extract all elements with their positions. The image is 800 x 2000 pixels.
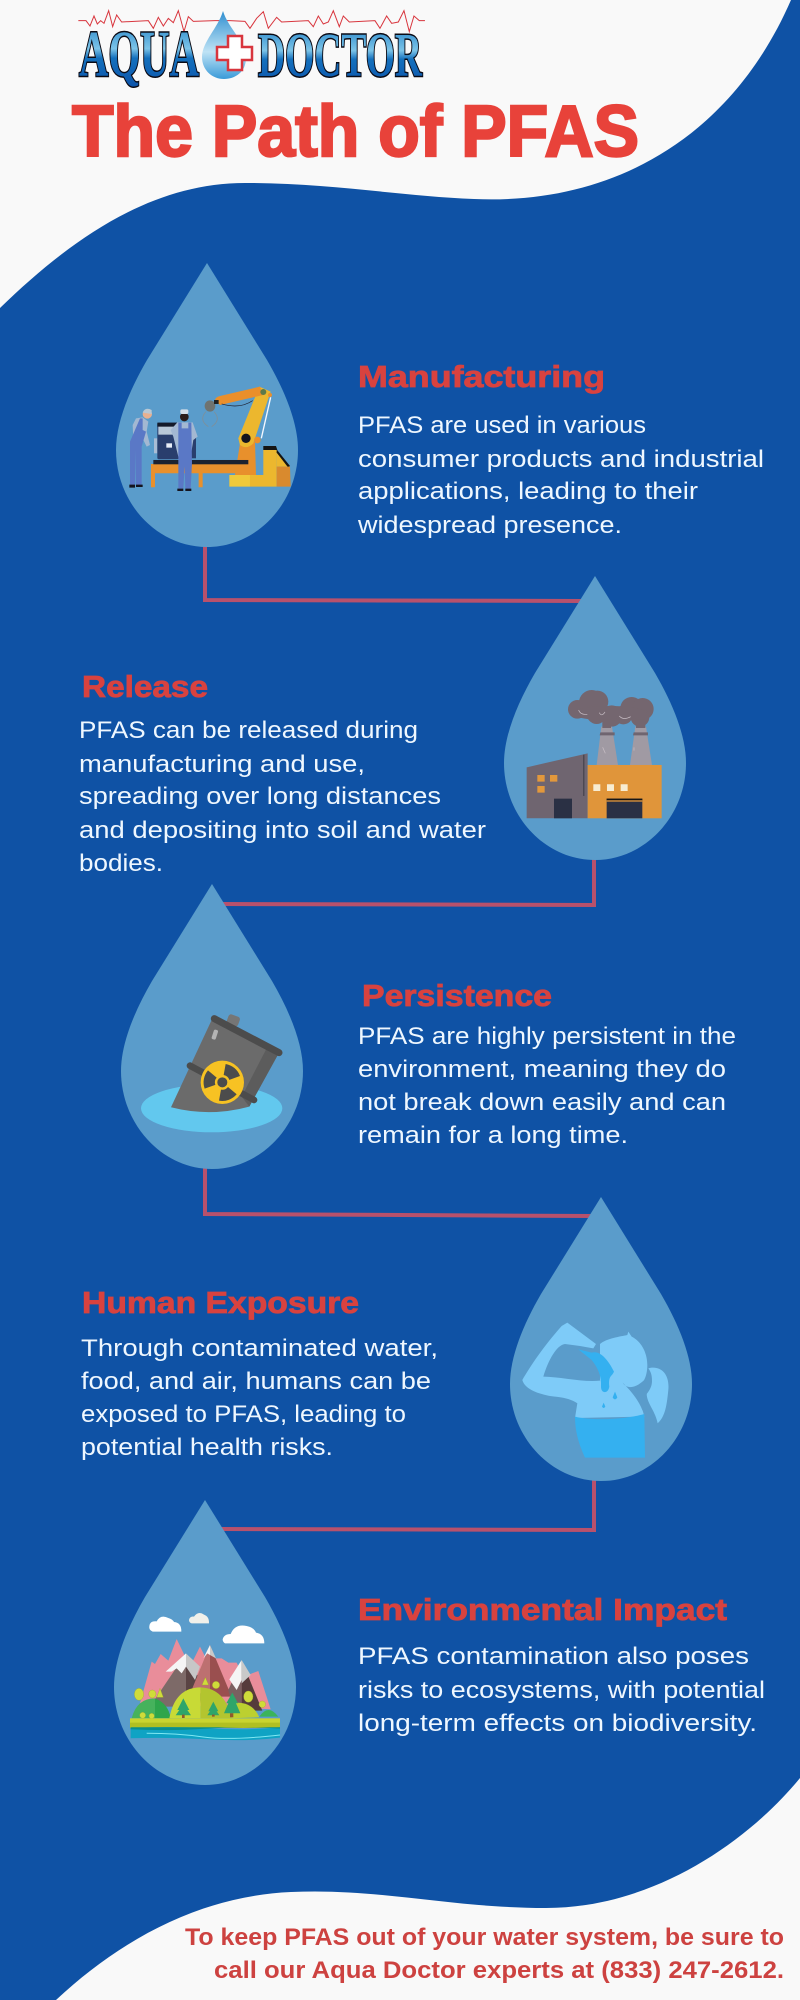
icon: smoking factory	[527, 690, 662, 818]
body text: manufacturing: applications, leading to their	[358, 478, 698, 505]
connector lines	[205, 545, 594, 1530]
body text: persistence: environment, meaning they do	[358, 1056, 726, 1083]
water drop 2	[504, 576, 686, 860]
heading: Release: Release	[82, 669, 208, 704]
icon: radioactive barrel in puddle	[141, 1014, 282, 1132]
body text: human exposure: Through contaminated water,	[81, 1335, 438, 1362]
panel: persistence step	[121, 884, 736, 1169]
body text: human exposure	[81, 1335, 438, 1461]
body text: release: manufacturing and use,	[79, 751, 365, 778]
title: The Path of PFAS	[72, 92, 639, 172]
body text: manufacturing: consumer products and industrial	[358, 446, 764, 473]
body text: manufacturing	[357, 412, 764, 539]
body text: environmental impact	[358, 1643, 765, 1737]
logo word DOCTOR: DOCTOR	[258, 22, 423, 90]
panel: manufacturing step	[116, 263, 764, 547]
body text: persistence	[358, 1023, 736, 1149]
body text: environmental impact: risks to ecosystems, with potential	[358, 1677, 765, 1704]
heading: Manufacturing: Manufacturing	[358, 359, 605, 394]
heading: Human Exposure: Human Exposure	[82, 1285, 359, 1320]
water drop 1	[116, 263, 298, 547]
panel: release step	[79, 576, 686, 877]
body text: release: bodies.	[79, 850, 163, 877]
logo word AQUA: AQUA	[79, 18, 199, 91]
heading: Persistence: Persistence	[362, 978, 552, 1013]
panel: environmental impact step	[114, 1500, 765, 1785]
footer call to action: call our Aqua Doctor experts at (833) 247-2612.	[214, 1957, 784, 1984]
body text: persistence: remain for a long time.	[358, 1122, 628, 1149]
body text: release	[79, 717, 486, 877]
footer call to action: To keep PFAS out of your water system, be sure to	[185, 1924, 784, 1951]
water drop 5	[114, 1500, 296, 1785]
footer call to action	[185, 1924, 784, 1984]
heartbeat line	[78, 11, 425, 32]
logo: Aqua Doctor	[78, 11, 425, 91]
body text: release: PFAS can be released during	[79, 717, 418, 744]
body text: environmental impact: PFAS contamination also poses	[358, 1643, 749, 1670]
icon: factory workers and robot arm	[129, 387, 291, 491]
icon: woman drinking water	[522, 1323, 668, 1458]
body text: human exposure: exposed to PFAS, leading to	[81, 1401, 406, 1428]
panel: human exposure step	[81, 1197, 692, 1481]
body text: human exposure: food, and air, humans can be	[81, 1368, 431, 1395]
logo red cross	[217, 36, 252, 70]
water drop 3	[121, 884, 303, 1169]
body text: manufacturing: PFAS are used in various	[358, 412, 646, 439]
heading: Environmental Impact: Environmental Impact	[358, 1592, 727, 1627]
body text: release: spreading over long distances	[79, 783, 441, 810]
body text: manufacturing: widespread presence.	[357, 512, 622, 539]
body text: persistence: not break down easily and can	[358, 1089, 726, 1116]
body text: environmental impact: long-term effects on biodiversity.	[358, 1710, 757, 1737]
logo water drop	[202, 11, 246, 79]
body text: release: and depositing into soil and water	[79, 817, 486, 844]
body text: human exposure: potential health risks.	[81, 1434, 333, 1461]
water drop 4	[510, 1197, 692, 1481]
body text: persistence: PFAS are highly persistent in the	[358, 1023, 736, 1050]
icon: mountain landscape	[130, 1613, 280, 1740]
